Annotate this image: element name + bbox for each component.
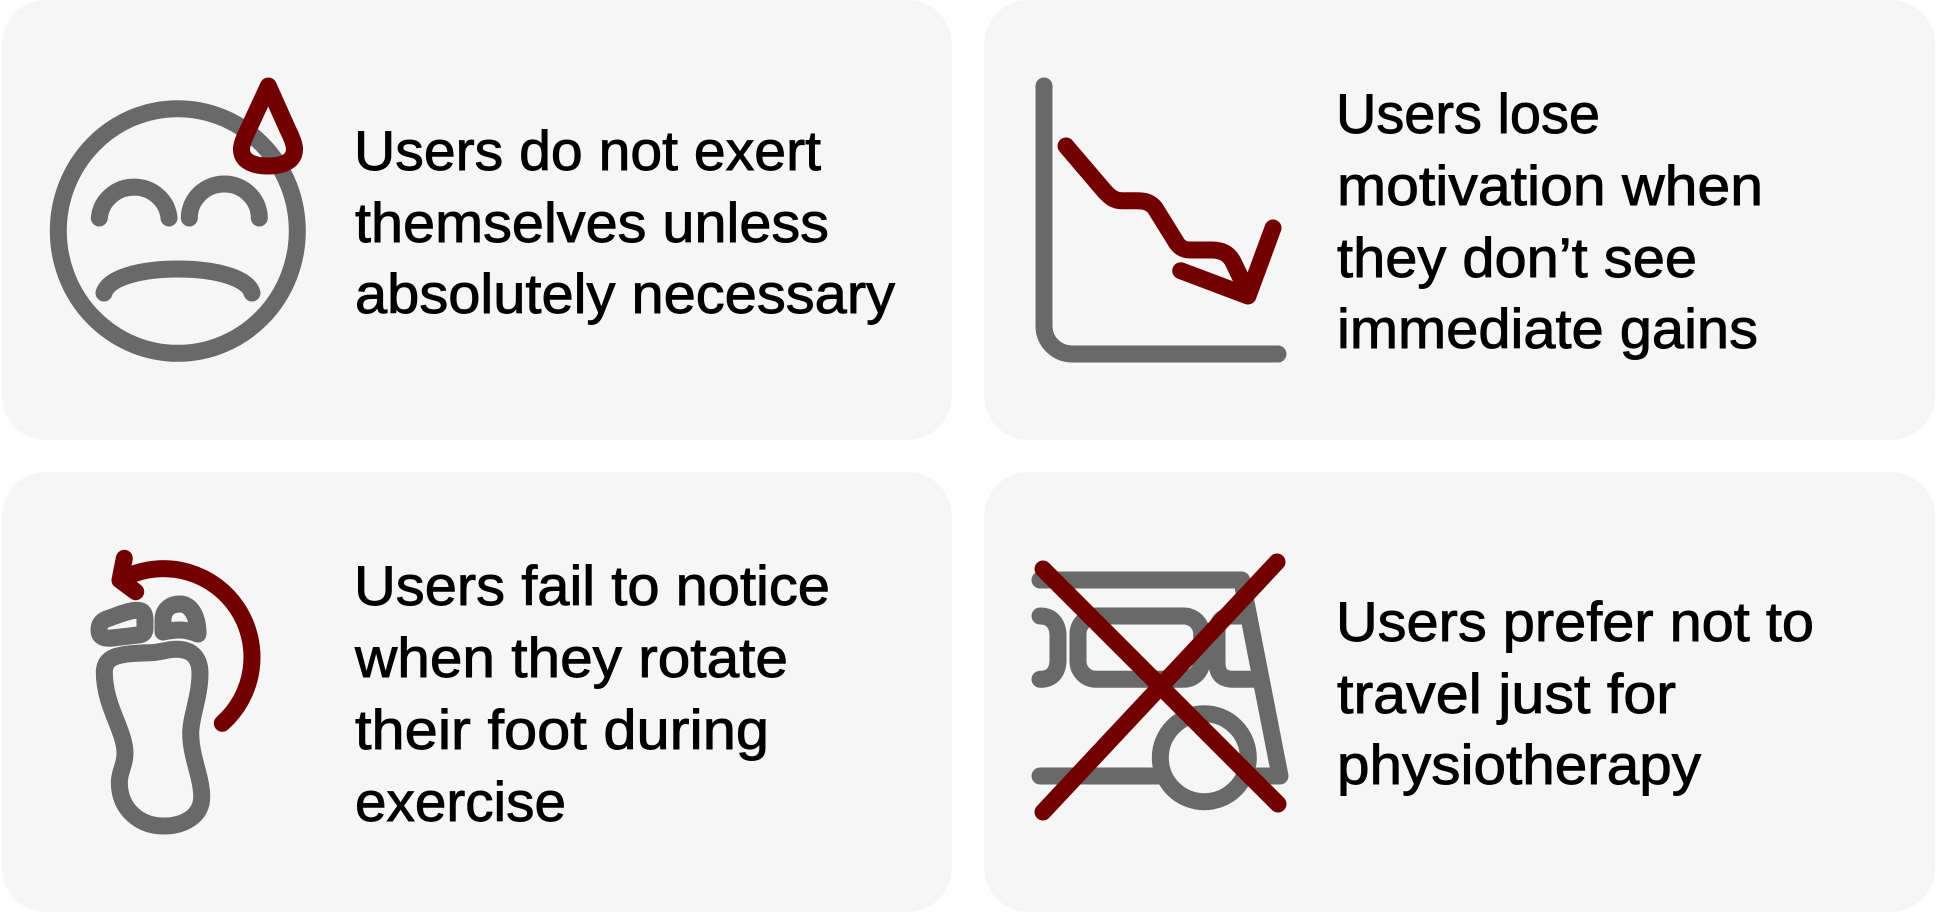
text: users prefer not to travel: travel just for: [1337, 662, 1676, 725]
text: users fail to notice: [354, 554, 830, 833]
text: users fail to notice: their foot during: [355, 698, 769, 761]
text: users fail to notice: Users fail to notice: [354, 554, 830, 617]
icon: crossed-out ambulance: [1040, 562, 1280, 812]
icon: sweating sad face: [58, 86, 297, 353]
text: users do not exert: Users do not exert: [354, 119, 821, 182]
panel: users prefer not to travel: [984, 472, 1935, 912]
text: users prefer not to travel: Users prefer not to: [1336, 590, 1814, 653]
panel: users do not exert: [2, 0, 952, 440]
text: users lose motivation: Users lose: [1336, 82, 1600, 145]
text: users do not exert: absolutely necessary: [355, 262, 895, 325]
text: users fail to notice: when they rotate: [354, 626, 788, 689]
panel: users fail to notice foot rotation: [2, 472, 952, 912]
icon: declining chart: [1044, 86, 1278, 354]
text: users prefer not to travel: physiotherapy: [1337, 733, 1701, 796]
text: users do not exert: [354, 119, 895, 325]
text: users do not exert: themselves unless: [355, 191, 829, 254]
text: users prefer not to travel: [1336, 590, 1814, 796]
text: users lose motivation: they don’t see: [1337, 226, 1697, 289]
text: users lose motivation: [1336, 82, 1763, 360]
text: users lose motivation: immediate gains: [1337, 297, 1758, 360]
panel: users lose motivation: [984, 0, 1935, 440]
icon: foot with rotation arrow: [99, 558, 252, 826]
text: users fail to notice: exercise: [355, 770, 566, 833]
text: users lose motivation: motivation when: [1337, 154, 1763, 217]
